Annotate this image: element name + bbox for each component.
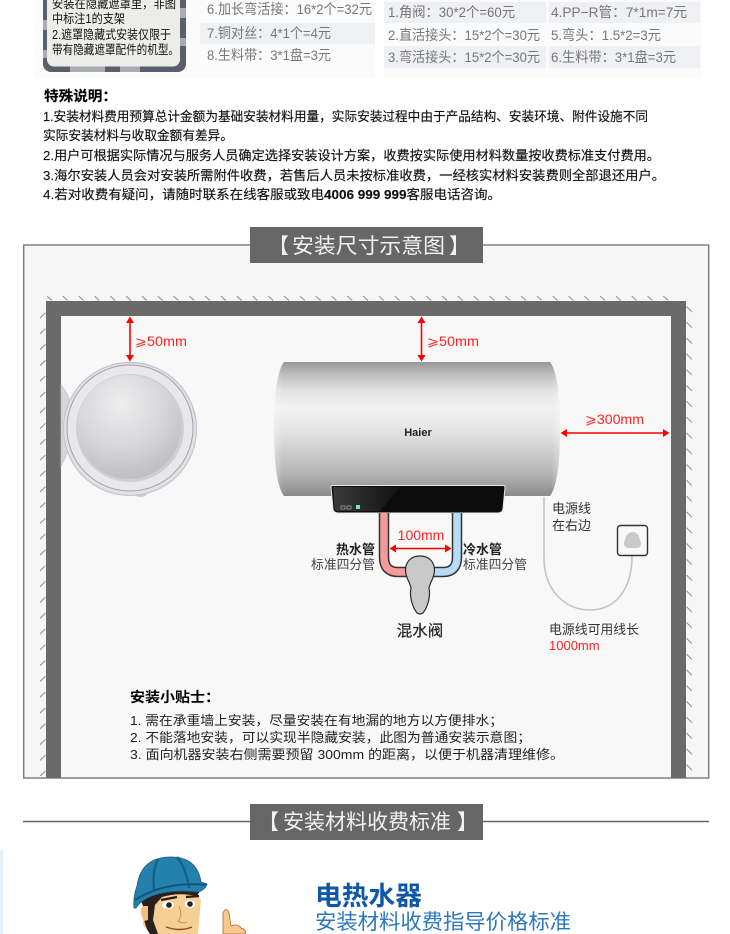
arrow: 50mm above tank xyxy=(418,316,479,362)
hot water pipe xyxy=(384,513,412,572)
title: electric water heater: 电热水器 xyxy=(315,881,422,911)
label: cord length: 1000mm xyxy=(549,638,600,653)
heading: material fee standard: 【 xyxy=(258,811,279,834)
heading: installation dimensions: 【 xyxy=(268,235,289,258)
label: hot water pipe xyxy=(311,542,375,572)
label: cold water pipe xyxy=(463,542,527,572)
heading: installation dimensions xyxy=(250,227,483,263)
worker mascot xyxy=(134,857,246,934)
arrow: 50mm above side view xyxy=(126,316,187,362)
water heater xyxy=(274,362,560,513)
label: cord on right side: 电源线 xyxy=(552,501,591,516)
special notes xyxy=(43,88,665,202)
price list: columns 2 and 3: 4.PP−R管：7*1m=7元 xyxy=(551,4,687,20)
heading: material fee standard xyxy=(23,804,709,840)
special notes: 1.安装材料费用预算总计金额为基础安装材料用量，实际安装过程中由于产品结构、安装环境、附件设施不同 xyxy=(43,109,648,124)
special notes: 2.用户可根据实际情况与服务人员确定选择安装设计方案，收费按实际使用材料数量按收费标准支付费用。 xyxy=(43,148,660,163)
price list: columns 2 and 3: 1.角阀：30*2个=60元 xyxy=(388,4,515,20)
dimension: 100mm xyxy=(390,527,452,552)
label: cord length: 电源线可用线长 xyxy=(549,622,639,637)
power socket xyxy=(618,526,648,556)
label: cold water pipe: 标准四分管 xyxy=(463,557,527,572)
price list: column 1: 7.铜对丝：4*1个=4元 xyxy=(207,25,331,41)
price list: columns 2 and 3: 3.弯活接头：15*2个=30元 xyxy=(388,49,540,65)
price list: columns 2 and 3: 2.直活接头：15*2个=30元 xyxy=(388,27,540,43)
special notes: 实际安装材料与收取金额有差异。 xyxy=(43,128,233,143)
arrow: 300mm right clearance xyxy=(560,411,670,437)
label: cord on right side xyxy=(552,501,591,533)
price list: column 1: 6.加长弯活接：16*2个=32元 xyxy=(207,1,372,17)
cold water pipe xyxy=(428,513,457,572)
note card: 2.遮罩隐藏式安装仅限于 xyxy=(52,27,171,42)
label: hot water pipe: 标准四分管 xyxy=(311,557,375,572)
installation tips: 3. 面向机器安装右侧需要预留 300mm 的距离，以便于机器清理维修。 xyxy=(130,747,564,762)
control panel xyxy=(331,486,505,513)
price list: columns 2 and 3: 5.弯头：1.5*2=3元 xyxy=(551,27,661,43)
arrow: 50mm above tank: ⩾50mm xyxy=(427,334,479,349)
heading: material fee standard: 】 xyxy=(457,811,478,834)
mixing valve xyxy=(397,556,443,640)
heading: material fee standard: 安装材料收费标准 xyxy=(283,811,451,834)
heading: installation dimensions: 】 xyxy=(449,235,470,258)
label: cold water pipe: 冷水管 xyxy=(463,542,502,557)
panel: installation dimensions xyxy=(24,245,709,778)
special notes: 特殊说明： xyxy=(44,88,117,104)
power cord xyxy=(544,497,632,610)
heading: installation dimensions: 安装尺寸示意图 xyxy=(292,235,445,258)
dimension: 100mm: 100mm xyxy=(398,527,444,543)
pointing hand xyxy=(223,910,246,934)
label: cord length xyxy=(549,622,639,653)
price list: column 1 xyxy=(200,1,375,63)
installation tips: 2. 不能落地安装，可以实现半隐藏安装，此图为普通安装示意图； xyxy=(130,730,531,746)
subtitle: fee guide: 安装材料收费指导价格标准 xyxy=(315,911,571,934)
installation tips: 1. 需在承重墙上安装，尽量安装在有地漏的地方以方便排水； xyxy=(130,713,503,729)
arrow: 50mm above side view: ⩾50mm xyxy=(135,334,187,349)
special notes: 3.海尔安装人员会对安装所需附件收费，若售后人员未按标准收费，一经核实材料安装费则全部退还用户。 xyxy=(43,168,665,183)
note card xyxy=(43,0,186,72)
label: cord on right side: 在右边 xyxy=(552,518,591,533)
installation tips xyxy=(130,689,564,762)
arrow: 300mm right clearance: ⩾300mm xyxy=(585,411,644,427)
wall outline xyxy=(40,296,692,778)
price list: columns 2 and 3 xyxy=(384,2,700,68)
installation tips: 安装小贴士： xyxy=(130,689,220,705)
price list: column 1: 8.生料带：3*1盘=3元 xyxy=(207,47,331,63)
tank side view xyxy=(61,362,196,497)
special notes: 4.若对收费有疑问，请随时联系在线客服或致电 4006 999 999 客服电话咨询。 xyxy=(43,187,501,202)
label: hot water pipe: 热水管 xyxy=(336,542,375,557)
price table background xyxy=(35,0,701,78)
price list: columns 2 and 3: 6.生料带：3*1盘=3元 xyxy=(551,49,676,65)
note card: 带有隐藏遮罩配件的机型。 xyxy=(52,42,179,57)
water heater: Haier xyxy=(404,427,432,439)
note card: 中标注1的支架 xyxy=(52,11,125,26)
mixing valve: 混水阀 xyxy=(397,622,443,640)
left edge tint xyxy=(0,850,3,934)
